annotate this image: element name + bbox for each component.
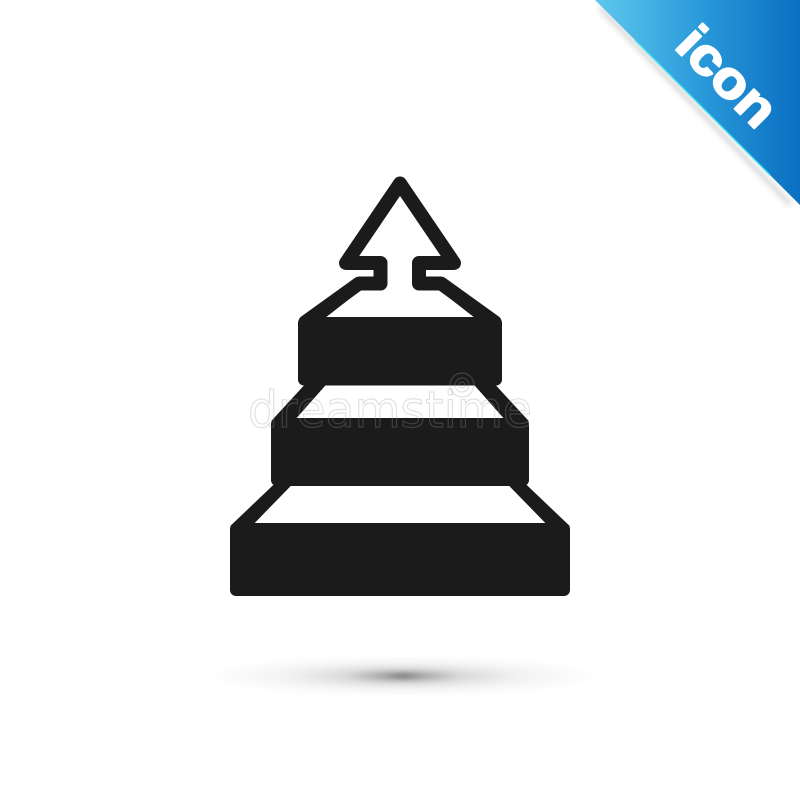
corner ribbon (595, 0, 800, 205)
top tier block (298, 317, 502, 386)
middle tier block (271, 418, 529, 486)
ribbon edge (635, 40, 770, 175)
arrow outline (306, 184, 494, 322)
bottom tier sides (231, 485, 569, 526)
icon: pyramid with up arrow (230, 184, 570, 596)
ribbon triangle (595, 0, 800, 205)
ribbon label: icon (665, 15, 789, 139)
watermark word: dreamstime (248, 381, 532, 439)
watermark logo (450, 373, 474, 397)
ribbon shadow (600, 8, 790, 204)
top tier inner fill (300, 290, 500, 318)
ground shadow (205, 656, 601, 696)
watermark (248, 373, 532, 439)
bottom tier block (230, 523, 570, 596)
middle tier sides (272, 384, 528, 421)
